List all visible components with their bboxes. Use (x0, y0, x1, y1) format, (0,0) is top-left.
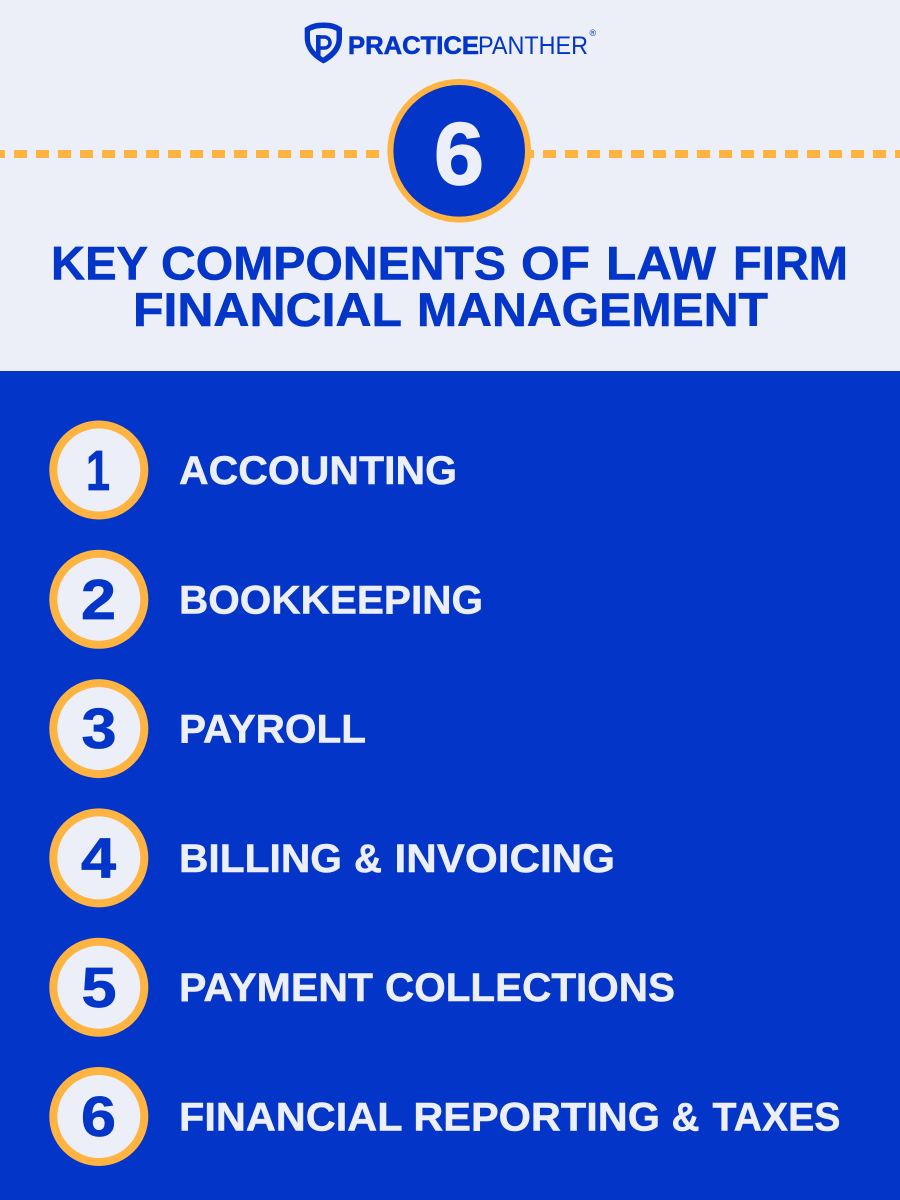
item 6: financial reporting and taxes (53, 1071, 841, 1162)
panel: components list (0, 371, 900, 1200)
badge: big number 6: 6 (434, 104, 484, 203)
title: FINANCIAL (133, 283, 402, 336)
item 4: billing and invoicing: INVOICING (394, 837, 615, 881)
item 6: financial reporting and taxes: TAXES (712, 1096, 840, 1140)
item 3: payroll: 3 (82, 697, 116, 761)
item 1: accounting (53, 424, 457, 516)
item 4: billing and invoicing: BILLING (179, 837, 342, 881)
logo wordmark: PRACTICE (348, 32, 479, 60)
item 2: bookkeeping (53, 554, 483, 645)
item 1: accounting: 1 (86, 439, 110, 503)
item 2: bookkeeping: BOOKKEEPING (179, 578, 483, 622)
item 5: payment collections: COLLECTIONS (385, 966, 675, 1010)
item 5: payment collections: 5 (82, 956, 116, 1020)
item 6: financial reporting and taxes: & (672, 1096, 700, 1140)
item 2: bookkeeping: 2 (81, 568, 116, 632)
title: OF (521, 236, 590, 289)
item 4: billing and invoicing: & (354, 837, 382, 881)
title: KEY (51, 236, 148, 289)
title: LAW (606, 236, 717, 289)
item 4: billing and invoicing (53, 812, 615, 903)
logo wordmark: PANTHER (478, 32, 588, 60)
item 6: financial reporting and taxes: 6 (81, 1085, 116, 1149)
item 5: payment collections (53, 942, 675, 1033)
title: FIRM (733, 236, 848, 289)
logo: PracticePanther (305, 22, 596, 64)
item 1: accounting: ACCOUNTING (179, 449, 457, 493)
title: COMPONENTS (161, 236, 506, 289)
registered mark: ® (590, 28, 596, 38)
item 5: payment collections: PAYMENT (179, 966, 373, 1010)
logo wordmark (348, 32, 588, 60)
item 6: financial reporting and taxes: FINANCIAL REPORTING (179, 1096, 660, 1140)
item 3: payroll (53, 683, 366, 774)
item 3: payroll: PAYROLL (179, 708, 366, 752)
title: MANAGEMENT (417, 283, 768, 336)
icon: shield (305, 22, 342, 64)
badge: big number 6 (390, 82, 528, 220)
title (51, 236, 848, 336)
item 4: billing and invoicing: 4 (81, 826, 116, 890)
